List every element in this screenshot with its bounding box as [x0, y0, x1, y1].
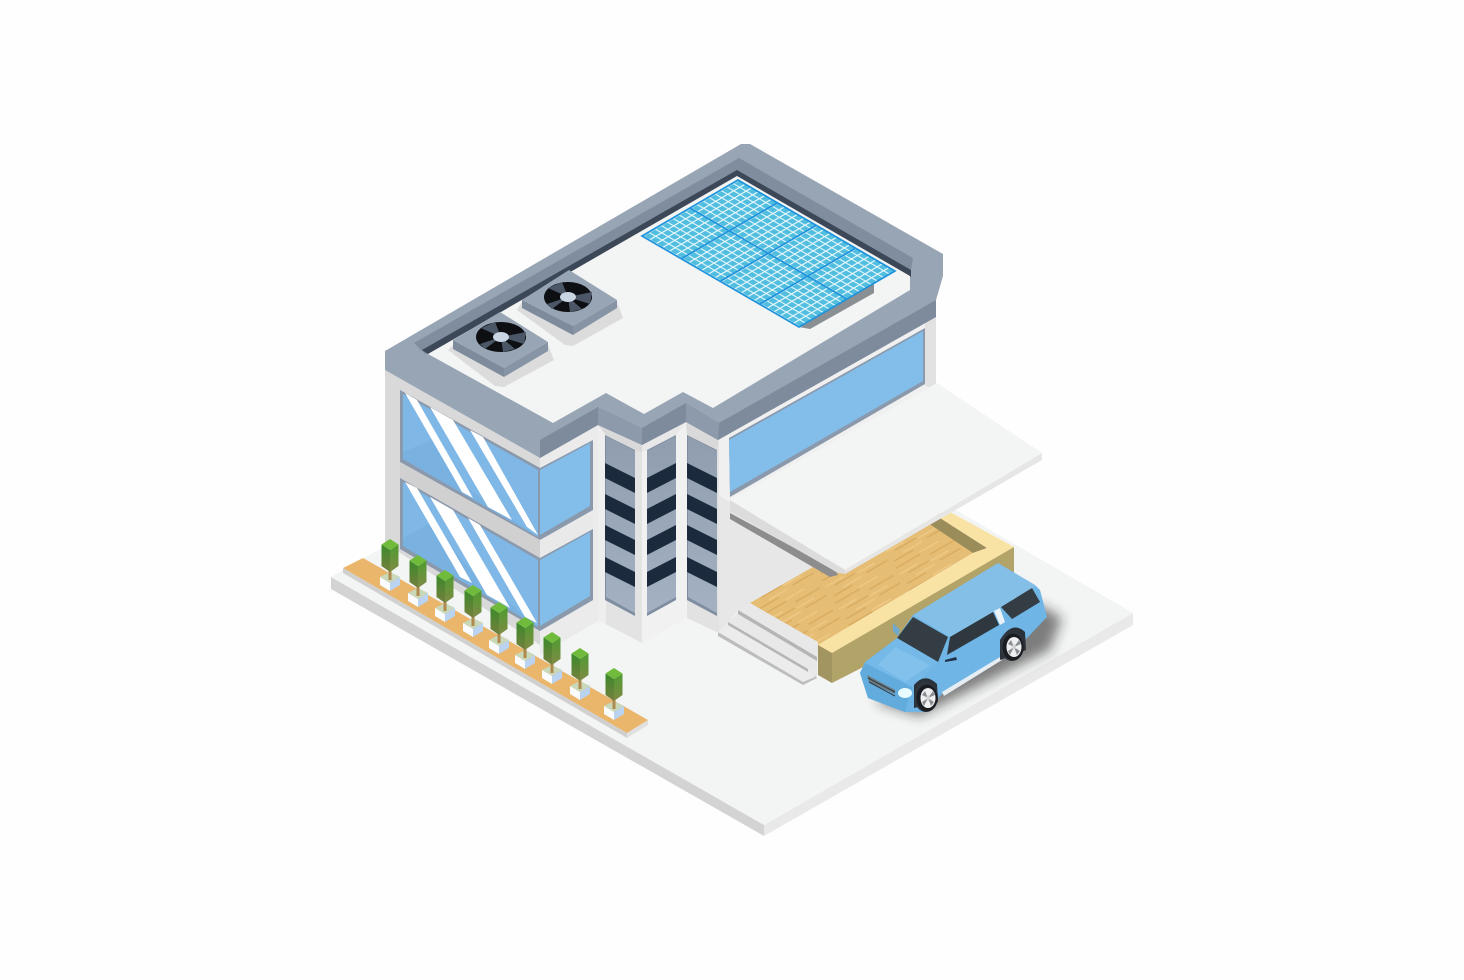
right upper window [729, 328, 925, 497]
blue SUV [860, 563, 1062, 716]
tree 1 [380, 539, 400, 591]
front steps [718, 603, 818, 685]
AC unit lower [448, 312, 554, 387]
tree 7 [542, 632, 562, 684]
tree 8 [570, 648, 590, 700]
tree 6 [515, 617, 535, 669]
entrance piers [598, 418, 719, 643]
building walls [385, 317, 936, 655]
tree 9 [604, 668, 624, 720]
tree 3 [435, 570, 455, 622]
tree 4 [463, 585, 483, 637]
wooden deck [750, 500, 1014, 683]
tree 5 [489, 602, 509, 654]
AC unit upper [517, 270, 623, 346]
ground platform [331, 495, 1133, 836]
planter strip [343, 558, 648, 738]
roof [385, 144, 943, 458]
solar panel array [642, 180, 895, 329]
tree 2 [408, 555, 428, 607]
left glass facade [400, 390, 593, 631]
canopy awning [730, 383, 1042, 577]
